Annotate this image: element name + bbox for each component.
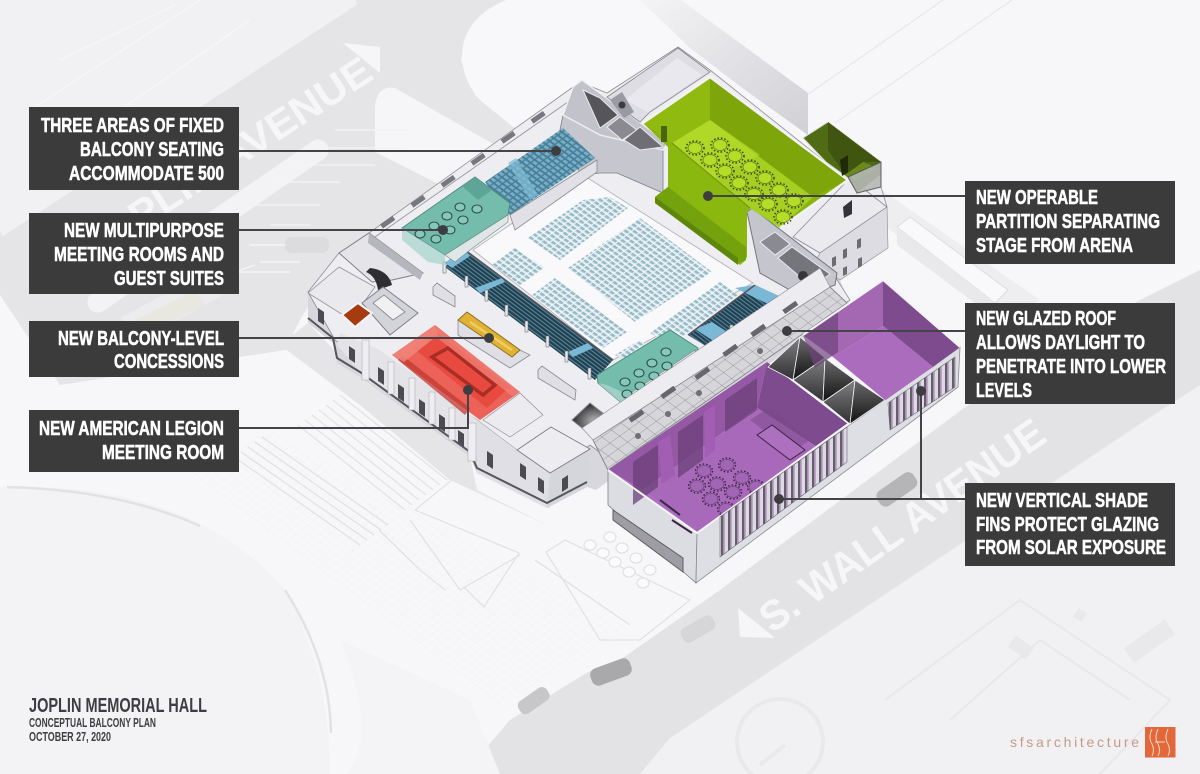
meeting rooms: north teal <box>402 177 510 265</box>
American Legion meeting room: red <box>392 325 520 420</box>
callout: shade fins: NEW VERTICAL SHADE <box>976 490 1148 512</box>
fixed balcony seating: east <box>688 285 783 350</box>
logo: sfsarchitecture: sfsarchitecture <box>1010 734 1139 750</box>
fins: rear <box>888 357 955 430</box>
callout: fixed balcony seating: ACCOMMODATE 500 <box>69 163 224 185</box>
callout: operable partition: NEW OPERABLE <box>976 187 1098 209</box>
title block <box>29 695 207 744</box>
balcony columns <box>443 262 733 379</box>
purple block exterior walls <box>608 347 960 583</box>
callout: concessions: NEW BALCONY-LEVEL <box>58 328 224 350</box>
callout: American Legion room <box>29 410 239 472</box>
title block: CONCEPTUAL BALCONY PLAN <box>29 716 156 730</box>
callout: multipurpose rooms: NEW MULTIPURPOSE <box>64 220 224 242</box>
tables <box>688 140 801 222</box>
callout: fixed balcony seating: THREE AREAS OF FIXED <box>41 115 224 137</box>
west roof <box>308 267 375 320</box>
north parapet <box>380 111 546 228</box>
callout dots <box>438 146 926 504</box>
concessions: yellow <box>458 312 530 368</box>
callout: operable partition: STAGE FROM ARENA <box>976 235 1133 257</box>
callout: fixed balcony seating <box>29 107 239 190</box>
road label: Joplin Avenue: JOPLIN AVENUE <box>73 49 380 270</box>
callout: multipurpose rooms: MEETING ROOMS AND <box>54 244 224 266</box>
floor partitions <box>433 283 576 400</box>
callout: glazed roof: NEW GLAZED ROOF <box>976 308 1116 330</box>
courtyard with stair <box>339 233 423 282</box>
title block: OCTOBER 27, 2020 <box>29 730 111 744</box>
title block: JOPLIN MEMORIAL HALL <box>29 695 207 717</box>
meeting rooms: south teal <box>597 330 698 410</box>
callout: glazed roof <box>965 303 1175 404</box>
callout: American Legion room: MEETING ROOM <box>102 442 224 464</box>
purple room: rear <box>803 280 960 400</box>
callout: glazed roof: ALLOWS DAYLIGHT TO <box>976 332 1145 354</box>
small room: dark orange <box>342 303 372 327</box>
callout: multipurpose rooms <box>29 213 239 294</box>
stage area: green <box>643 77 848 265</box>
ground shadow <box>280 323 547 525</box>
building massing <box>308 47 888 508</box>
fixed balcony seating: west <box>445 248 613 380</box>
stage side shafts <box>747 208 837 297</box>
callout: concessions: CONCESSIONS <box>114 351 224 373</box>
vehicles <box>125 217 1008 716</box>
callout: multipurpose rooms: GUEST SUITES <box>114 268 224 290</box>
road label: S. Wall Avenue: S. WALL AVENUE <box>750 409 1054 641</box>
upper terrace room <box>362 287 418 335</box>
fins: front <box>720 427 847 557</box>
callout: concessions <box>29 321 239 377</box>
callout: operable partition <box>965 181 1175 264</box>
historic facade <box>337 333 477 455</box>
service shafts: gray <box>768 337 885 424</box>
purple room: front <box>608 362 848 533</box>
logo: sfsarchitecture <box>1010 727 1176 758</box>
callout: American Legion room: NEW AMERICAN LEGION <box>39 418 224 440</box>
callout: glazed roof: LEVELS <box>976 380 1032 402</box>
fixed balcony seating: north <box>485 128 597 230</box>
glazed roof corridor <box>582 268 847 470</box>
chairs <box>686 138 803 224</box>
callout: shade fins <box>965 483 1175 566</box>
circular stair <box>572 403 618 440</box>
loose arena seating <box>492 197 738 362</box>
arena floor <box>473 175 753 360</box>
stage core walls <box>560 115 663 193</box>
plaza steps and landscape <box>234 395 690 640</box>
leader lines <box>239 151 966 499</box>
east block <box>793 178 887 253</box>
back-of-house room: dark green <box>803 122 881 193</box>
callout: fixed balcony seating: BALCONY SEATING <box>80 139 224 161</box>
